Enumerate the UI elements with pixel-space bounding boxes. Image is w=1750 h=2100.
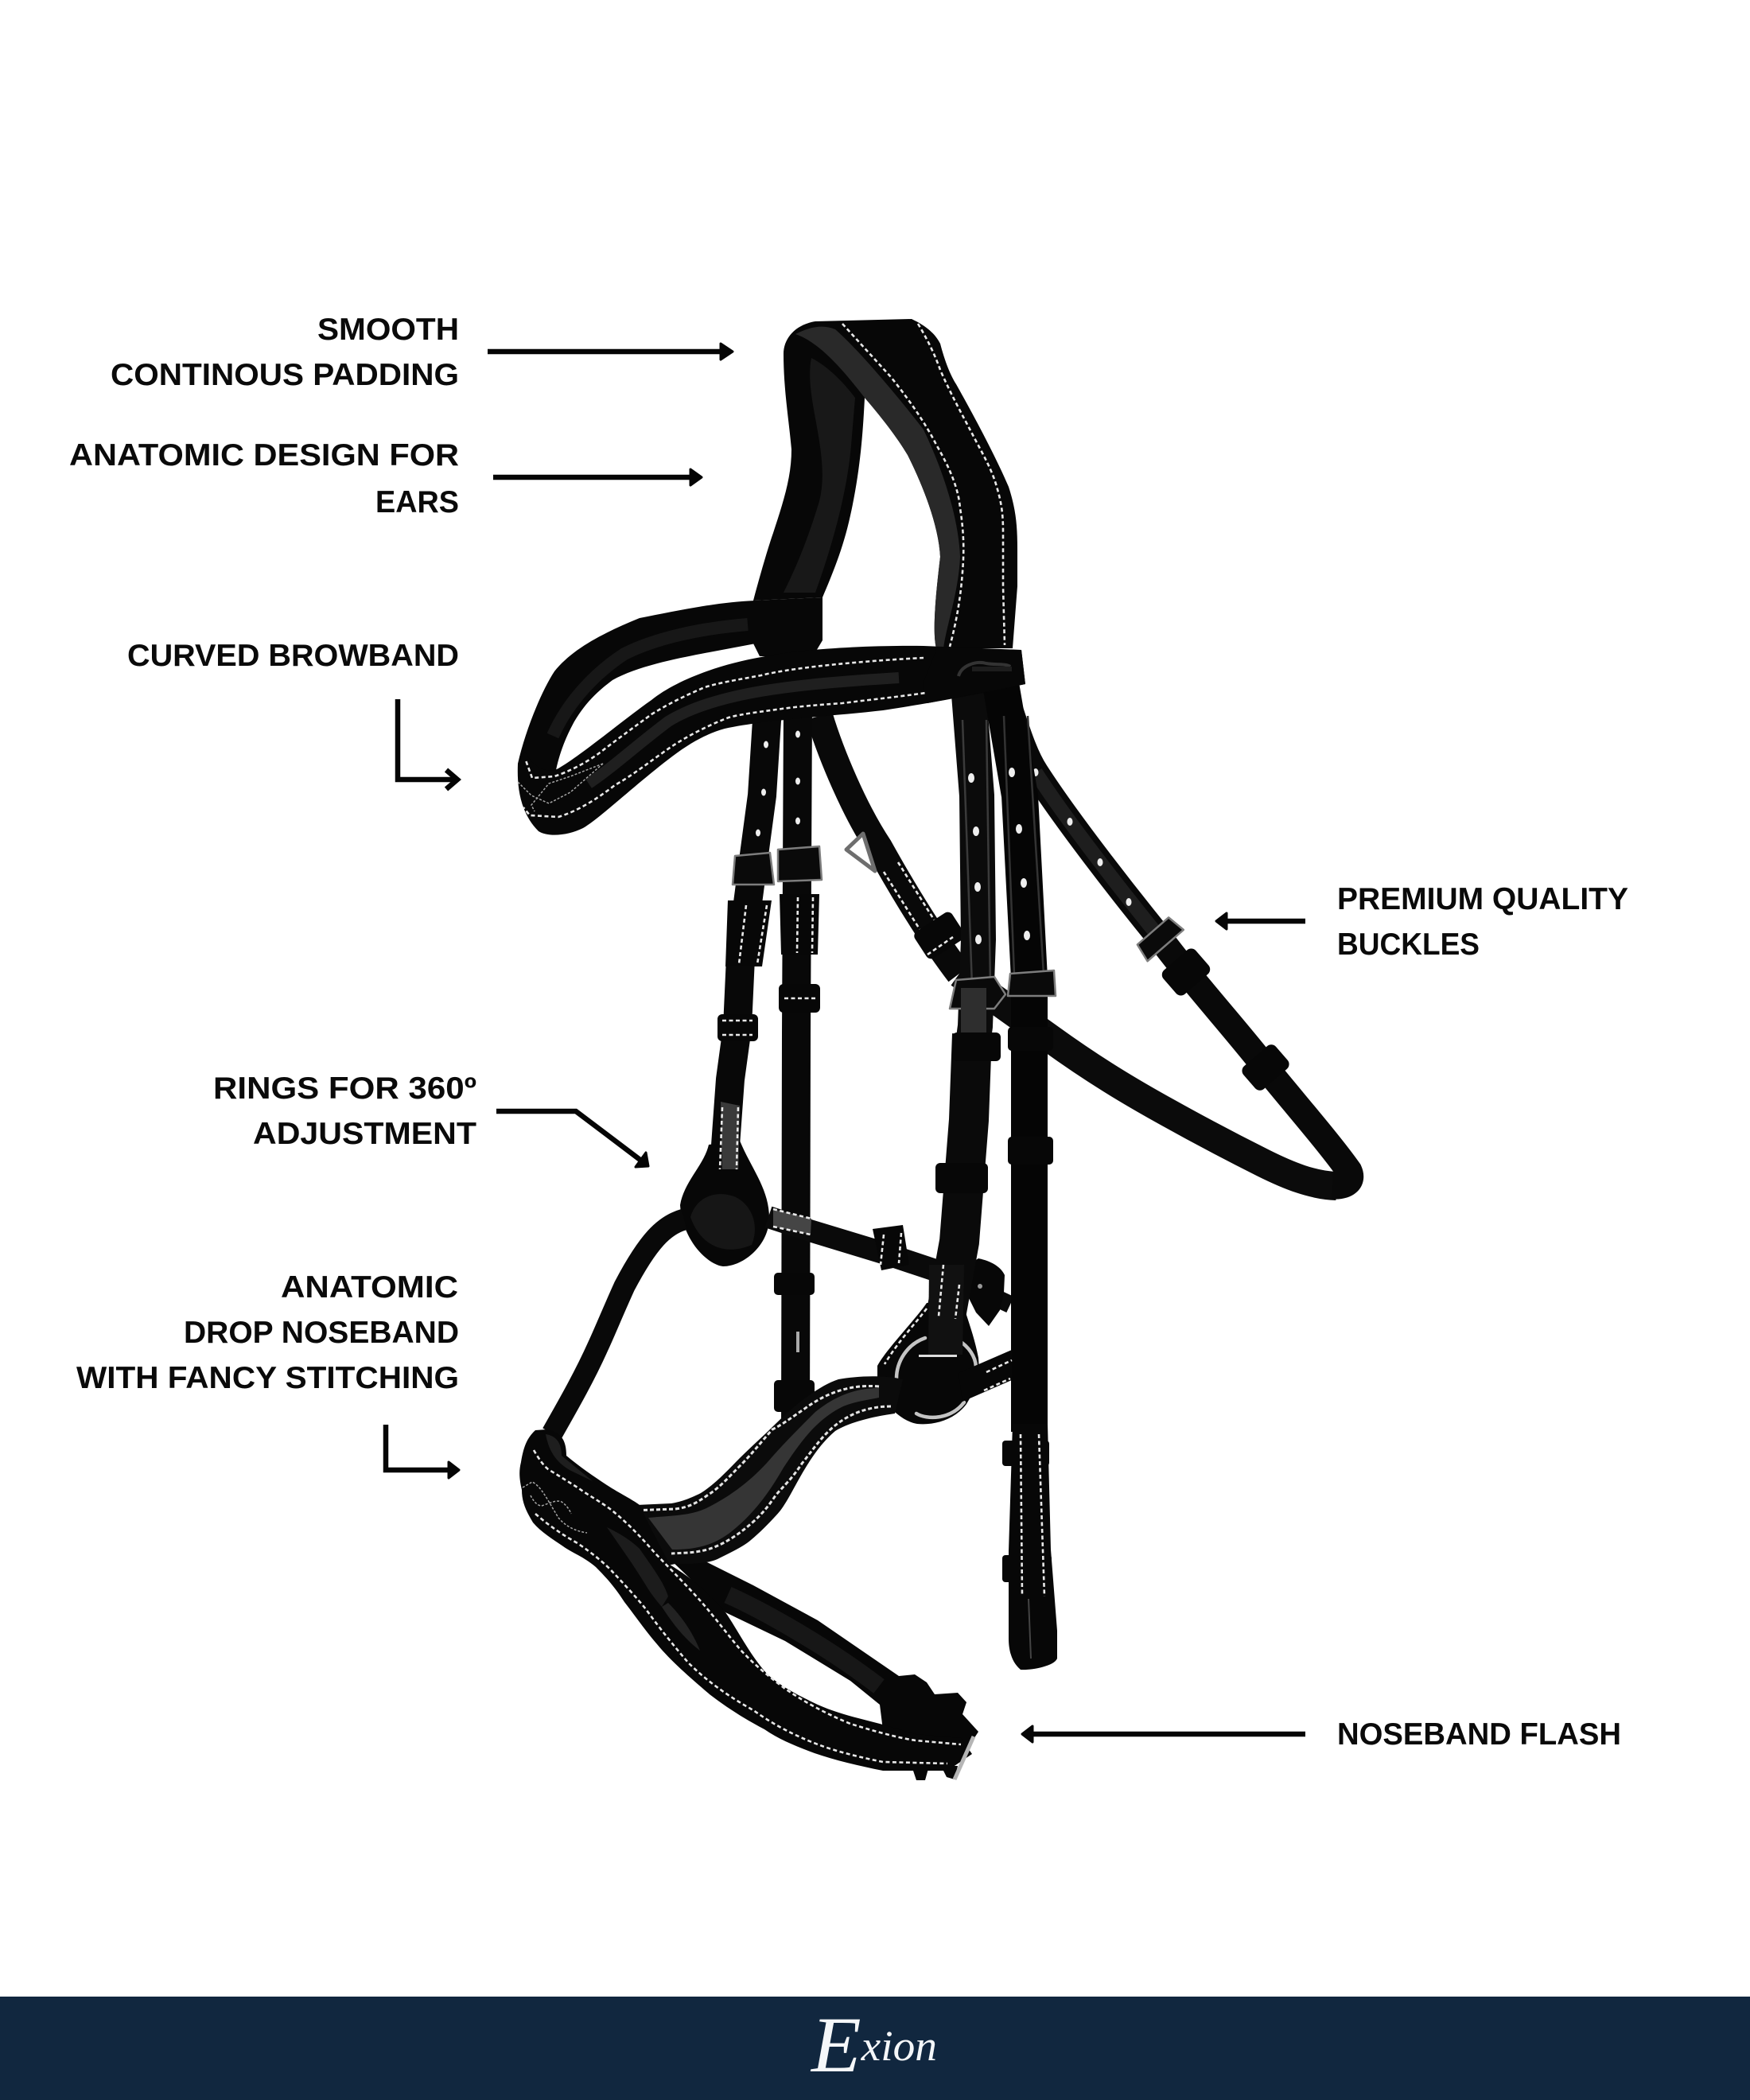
label: smooth continuous padding: SMOOTH [317,313,459,347]
label: anatomic design for ears: EARS [375,485,459,519]
logo wordmark: xion [861,2022,937,2070]
arrow: rings [496,1111,648,1167]
diagonal strap buckle and keeper [846,834,966,961]
curved browband lining [518,597,822,791]
upper cavesson strap [552,1209,1010,1433]
centre cheek strap one [935,684,1005,1320]
noseband ring [877,1265,1012,1424]
bridle illustration [518,319,1351,1780]
arrow: curved browband [398,699,457,789]
drop noseband front panel [519,1429,972,1771]
label: premium quality buckles: PREMIUM QUALITY [1337,882,1628,916]
arrow: anatomic design [493,469,702,485]
arrow: noseband flash [1022,1726,1305,1742]
label: anatomic drop noseband: WITH FANCY STITCHING [76,1361,459,1395]
centre cheek strap two [1001,684,1057,1670]
teardrop ring attachment [680,1102,769,1266]
label: anatomic design for ears [69,438,459,519]
label: anatomic drop noseband [76,1270,459,1395]
arrow: premium buckles [1216,913,1305,929]
drop noseband side panel [629,1376,903,1567]
logo wordmark: E [810,2001,861,2089]
throatlatch loop strap [819,692,1351,1186]
label: rings for 360 adjustment: RINGS FOR 360º [213,1071,476,1106]
label: rings for 360 adjustment [213,1071,476,1151]
inner cheek strap [774,708,822,1432]
label: smooth continuous padding [111,313,459,392]
label: anatomic drop noseband: ANATOMIC [281,1270,458,1305]
flash buckle [912,1736,974,1780]
label: noseband flash: NOSEBAND FLASH [1337,1717,1621,1752]
browband loop [923,650,1025,703]
curved browband front [518,646,1025,835]
label: smooth continuous padding: CONTINOUS PADDING [111,358,459,392]
label: premium quality buckles [1337,882,1628,962]
label: rings for 360 adjustment: ADJUSTMENT [253,1117,476,1151]
label: anatomic design for ears: ANATOMIC DESIGN FOR [69,438,459,472]
footer band [0,1997,1750,2100]
arrow: drop noseband [386,1425,459,1478]
left cheek strap [718,708,774,1145]
label: curved browband: CURVED BROWBAND [127,639,459,673]
flash strap [670,1559,978,1750]
crown piece with padding [753,319,1017,648]
label: anatomic drop noseband: DROP NOSEBAND [184,1316,459,1350]
label: premium quality buckles: BUCKLES [1337,928,1480,962]
arrow: smooth padding [488,344,733,360]
